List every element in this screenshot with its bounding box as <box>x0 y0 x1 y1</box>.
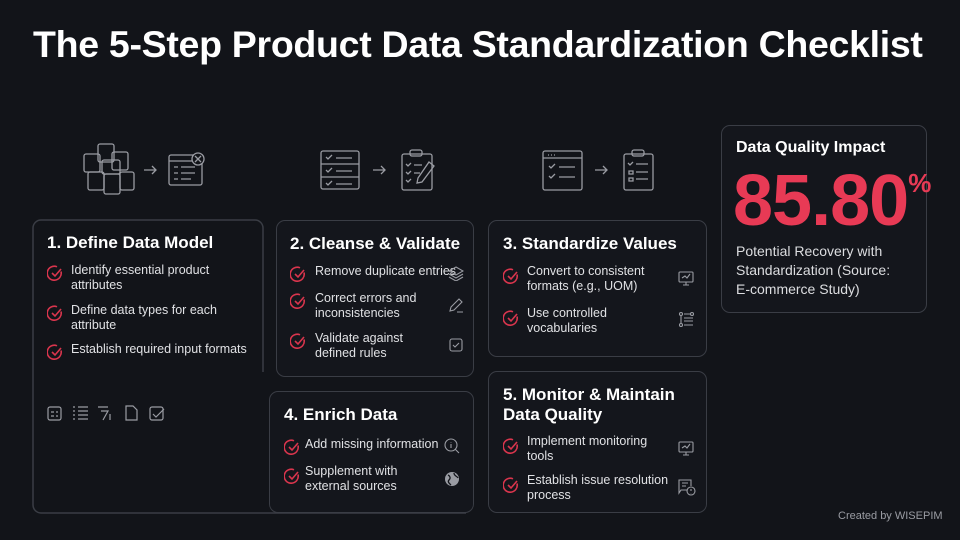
item 5.2 <box>503 473 696 502</box>
item 2.2: inconsistencies <box>315 306 400 320</box>
item 3.1: Convert to consistent <box>527 264 644 278</box>
impact heading: Data Quality Impact <box>736 139 885 156</box>
item 3.1: formats (e.g., UOM) <box>527 279 637 293</box>
big stat: 85.80% <box>733 161 930 241</box>
item 2.3: defined rules <box>315 346 387 360</box>
item 3.2 <box>503 306 694 335</box>
icon row <box>47 405 164 421</box>
panel 2: cleanse & validate <box>276 220 474 377</box>
item 1.1: Identify essential product attributes <box>71 263 209 292</box>
heading 3: 3. Standardize Values <box>503 234 677 253</box>
item 4.1: Add missing information <box>305 437 438 451</box>
panel 1: define data model <box>47 233 247 421</box>
item 5.1: Implement monitoring <box>527 434 647 448</box>
item 3.2: Use controlled <box>527 306 607 320</box>
stat description: E-commerce Study) <box>736 281 860 297</box>
footer credit: Created by WISEPIM <box>838 510 943 522</box>
item 2.2 <box>290 291 463 320</box>
item 2.3: Validate against <box>315 331 403 345</box>
item 1.2: Define data types for each attribute <box>71 303 217 332</box>
item 3.2: vocabularies <box>527 321 597 335</box>
item 5.1: tools <box>527 449 553 463</box>
item 4.2: external sources <box>305 479 397 493</box>
item 5.2: process <box>527 488 571 502</box>
heading 2: 2. Cleanse & Validate <box>290 234 460 253</box>
stat description: Standardization (Source: <box>736 262 890 278</box>
item 2.1 <box>290 264 464 282</box>
item 2.1: Remove duplicate entries <box>315 264 456 278</box>
item 4.2 <box>284 464 459 493</box>
item 5.1 <box>503 434 694 463</box>
item 3.1 <box>503 264 694 293</box>
heading 1: 1. Define Data Model <box>47 233 213 252</box>
heading 5: Data Quality <box>503 405 602 424</box>
item 1.3: Establish required input formats <box>71 342 247 356</box>
item 5.2: Establish issue resolution <box>527 473 668 487</box>
stat description: Potential Recovery with <box>736 243 882 259</box>
heading 4: 4. Enrich Data <box>284 405 397 424</box>
heading 5 <box>503 385 675 424</box>
heading 5: 5. Monitor & Maintain <box>503 385 675 404</box>
panel 5: monitor & maintain <box>488 371 707 513</box>
panel: data quality impact <box>721 125 927 313</box>
item 2.3 <box>290 331 463 360</box>
icons: step 2 illustration <box>320 149 435 191</box>
panel 4: enrich data <box>269 391 474 513</box>
item 4.1 <box>284 437 460 455</box>
panel 3: standardize values <box>488 220 707 357</box>
item 1.3 <box>47 342 247 360</box>
icons: step 1 illustration <box>83 143 205 195</box>
title: The 5-Step Product Data Standardization Checklist <box>33 23 923 65</box>
item 4.2: Supplement with <box>305 464 397 478</box>
stat description <box>736 243 890 297</box>
item 2.2: Correct errors and <box>315 291 416 305</box>
icons: step 3 illustration <box>542 149 654 191</box>
